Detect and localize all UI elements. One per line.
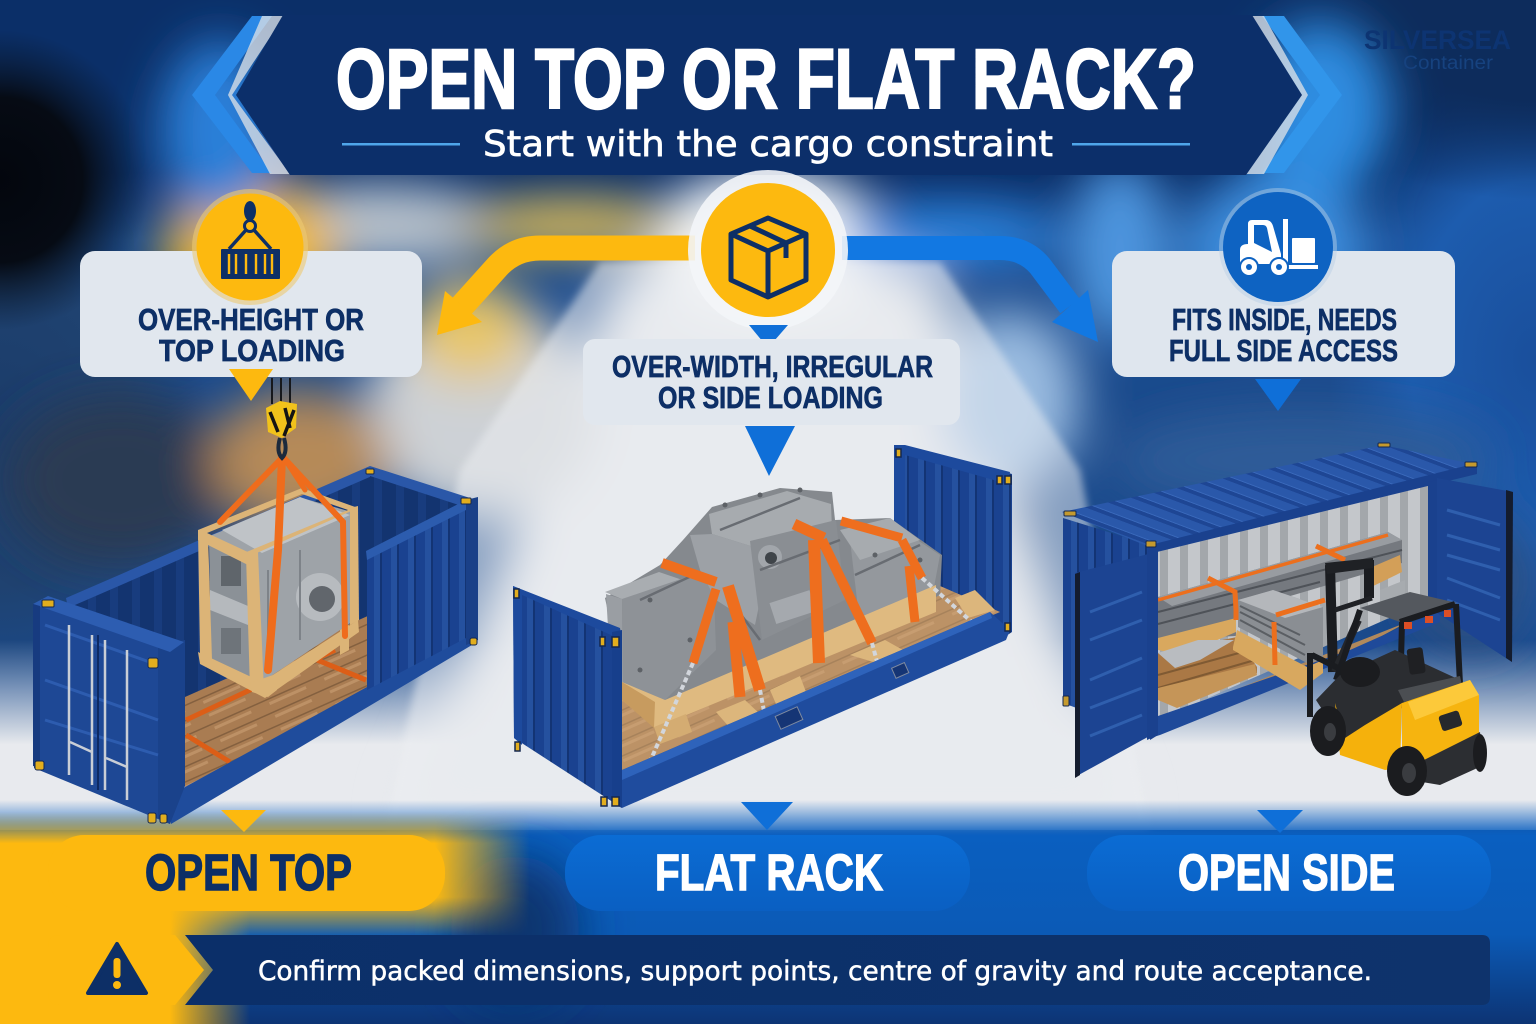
- panel: side access: FULL SIDE ACCESS: [1169, 333, 1398, 368]
- orange lashing straps: [662, 521, 922, 697]
- far end wall interior: [370, 470, 467, 620]
- pill: open side: OPEN SIDE: [1178, 844, 1395, 901]
- panel: over-height: [80, 189, 422, 377]
- header banner: [192, 15, 1342, 175]
- corner castings: [35, 469, 477, 823]
- icon: cargo box: [688, 170, 848, 330]
- corner post: [1148, 545, 1158, 740]
- wooden floor: [185, 615, 370, 787]
- panel: over-width: OR SIDE LOADING: [658, 380, 883, 415]
- chains: [642, 578, 983, 780]
- machinery load: [605, 488, 942, 700]
- timber feet: [716, 590, 995, 728]
- wood deck: [622, 560, 1000, 772]
- pill: flat rack: FLAT RACK: [655, 844, 883, 901]
- arrow: blue to open side: [842, 248, 1098, 342]
- near end wall: [513, 586, 622, 808]
- lifting straps: [220, 458, 345, 670]
- crate timber frame: [198, 488, 359, 698]
- arrow: yellow to open top: [437, 248, 695, 335]
- roof: [1062, 445, 1477, 547]
- message: Confirm packed dimensions, support points, centre of gravity and route acceptance.: [258, 956, 1372, 987]
- subtitle: Start with the cargo constraint: [483, 124, 1053, 165]
- panel: over-height: TOP LOADING: [159, 333, 345, 368]
- icon: warning triangle: [88, 944, 146, 993]
- pill: open top: [48, 835, 445, 911]
- timber skid beam: [622, 585, 936, 728]
- right chevron: [1262, 16, 1342, 173]
- far long wall interior: [66, 470, 370, 720]
- arrow: small blue down from centre icon: [749, 325, 788, 348]
- panel: side access: FITS INSIDE, NEEDS: [1172, 302, 1397, 337]
- bar body: [185, 935, 1490, 1005]
- panel: over-width: [583, 339, 960, 425]
- subtitle rule left: [342, 143, 460, 146]
- panel: over-width: OVER-WIDTH, IRREGULAR: [612, 349, 933, 384]
- wheels: [1310, 706, 1346, 756]
- bottom rail: [170, 625, 477, 824]
- panel: side access: [1112, 188, 1455, 377]
- arrow: yellow down from over-height: [229, 369, 273, 401]
- left chevron: [192, 16, 272, 173]
- rear grey interior: [1158, 483, 1430, 720]
- forklift: [1310, 558, 1487, 796]
- counterweight: [1408, 732, 1484, 785]
- subtitle rule right: [1072, 143, 1190, 146]
- illustration: flat rack: [513, 445, 1012, 808]
- floor: [1158, 610, 1430, 720]
- pill: open top: OPEN TOP: [145, 844, 352, 901]
- callout: confirm bar: [48, 935, 1490, 1005]
- near rail: [622, 612, 1010, 808]
- arrow: yellow to open top pill: [221, 810, 266, 832]
- arrow: blue down from side access: [1255, 379, 1301, 411]
- door end face: [33, 469, 477, 824]
- crate and machinery: [198, 488, 359, 698]
- end wall: [1063, 518, 1150, 735]
- bottom rail: [1150, 610, 1440, 738]
- icon: crane lifting container: [192, 189, 308, 305]
- watermark: [1364, 25, 1511, 74]
- arrow: blue down from over-width: [745, 426, 795, 476]
- heading text: OVER-HEIGHT OR: [138, 302, 364, 337]
- arrow: blue to open side pill: [1257, 810, 1303, 833]
- mast: [1330, 565, 1333, 672]
- warning tab: [48, 935, 204, 1005]
- banner body: [236, 15, 1302, 175]
- illustration: open side container: [1062, 443, 1513, 796]
- stacked steel and pallets: [1158, 532, 1405, 708]
- near long wall: [367, 503, 468, 690]
- watermark: SILVERSEA: [1364, 25, 1511, 55]
- corner castings: [514, 449, 1011, 806]
- watermark: Container: [1403, 53, 1494, 74]
- crane hook: [266, 378, 297, 458]
- far end wall: [894, 447, 1012, 640]
- title: OPEN TOP OR FLAT RACK?: [336, 32, 1196, 126]
- open right door: [1437, 478, 1513, 662]
- cab: [1316, 650, 1460, 745]
- forks: [1310, 653, 1338, 717]
- pill: flat rack: [565, 835, 970, 911]
- illustration: open top container: [33, 378, 478, 824]
- arrow: blue to flat rack pill: [741, 802, 793, 830]
- pill: open side: [1087, 835, 1491, 911]
- open left door: [1075, 553, 1155, 777]
- corner castings: [1063, 443, 1477, 706]
- yellow body: [1402, 680, 1479, 768]
- overhead guard: [1360, 592, 1457, 622]
- icon: forklift: [1219, 188, 1337, 306]
